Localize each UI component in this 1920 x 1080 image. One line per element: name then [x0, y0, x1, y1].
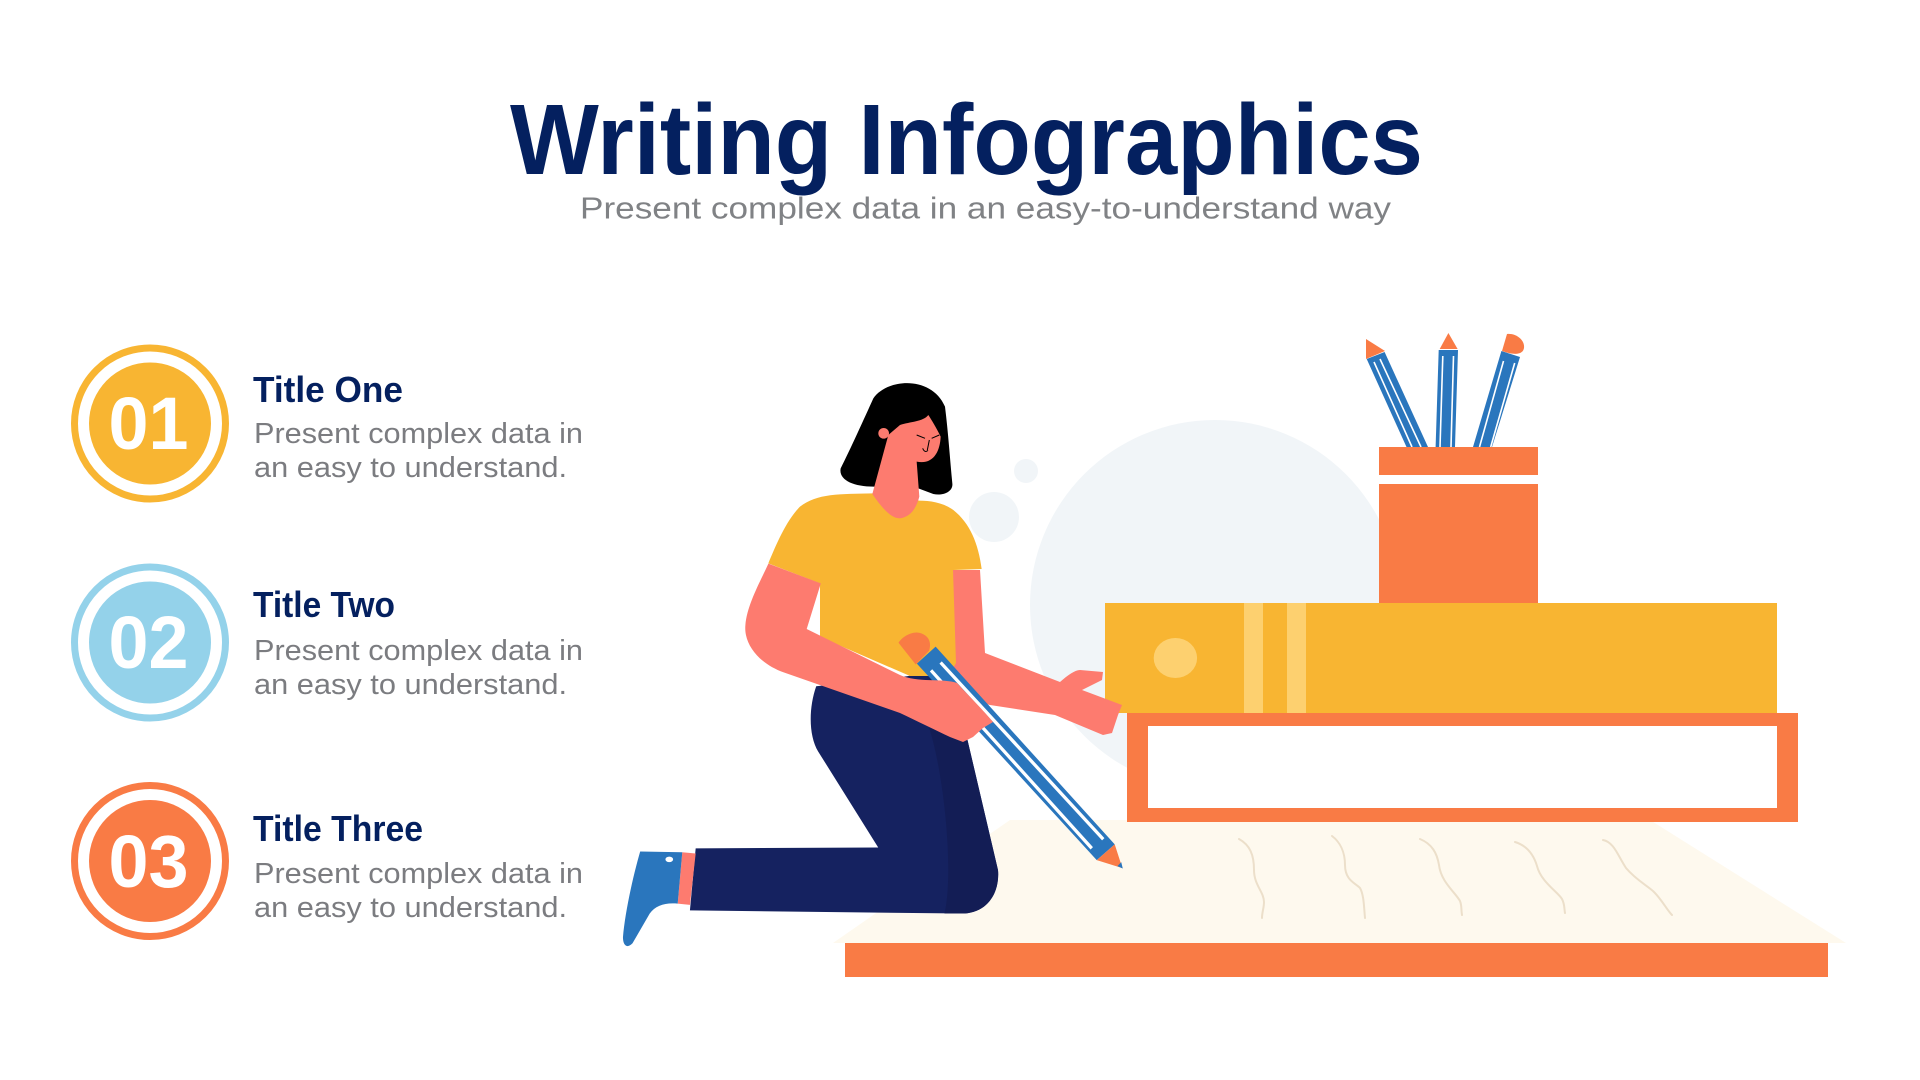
woman kneeling and holding pencil: [623, 383, 1123, 946]
pencils in cup: [1366, 333, 1524, 447]
shoe: [623, 851, 682, 946]
paper scribbles: [1239, 836, 1672, 918]
orange base slab: [845, 943, 1828, 977]
orange book: [1127, 713, 1798, 822]
pants: [690, 672, 998, 914]
body text 3: Present complex data in: [254, 858, 583, 890]
badge 03: 03: [108, 820, 188, 903]
body text 1: [254, 418, 583, 484]
body text 3: an easy to understand.: [254, 892, 567, 924]
shirt: [768, 493, 982, 676]
background circles: [969, 420, 1400, 790]
heading: title two: Title Two: [253, 584, 395, 625]
badge 02: 02: [108, 601, 188, 684]
pencil right: [1473, 334, 1524, 447]
paper sheet: [833, 820, 1846, 943]
subtitle: Present complex data in an easy-to-understand way: [580, 190, 1392, 226]
sock: [678, 852, 696, 905]
big pencil: [899, 632, 1123, 868]
body text 2: an easy to understand.: [254, 669, 567, 701]
body text 2: [254, 635, 583, 701]
list item 1: [74, 348, 583, 499]
yellow book: [1105, 603, 1777, 713]
list item 3: [74, 786, 583, 936]
right arm and hand: [940, 570, 1122, 735]
badge 01: 01: [108, 382, 188, 465]
badge 01: [74, 348, 226, 499]
pencil cup: [1379, 447, 1538, 603]
badge 03: [74, 786, 226, 936]
body text 2: Present complex data in: [254, 635, 583, 667]
heading: title one: Title One: [253, 369, 403, 410]
left arm and hand: [745, 564, 993, 742]
neck and face: [872, 415, 941, 518]
body text 3: [254, 858, 583, 924]
body text 1: Present complex data in: [254, 418, 583, 450]
pencil left: [1366, 339, 1428, 447]
heading: title three: Title Three: [253, 808, 423, 849]
body text 1: an easy to understand.: [254, 452, 567, 484]
badge 02: [74, 567, 226, 718]
hair: [840, 383, 952, 494]
pencil middle: [1436, 333, 1458, 447]
list item 2: [74, 567, 583, 718]
title: Writing Infographics: [510, 84, 1423, 196]
